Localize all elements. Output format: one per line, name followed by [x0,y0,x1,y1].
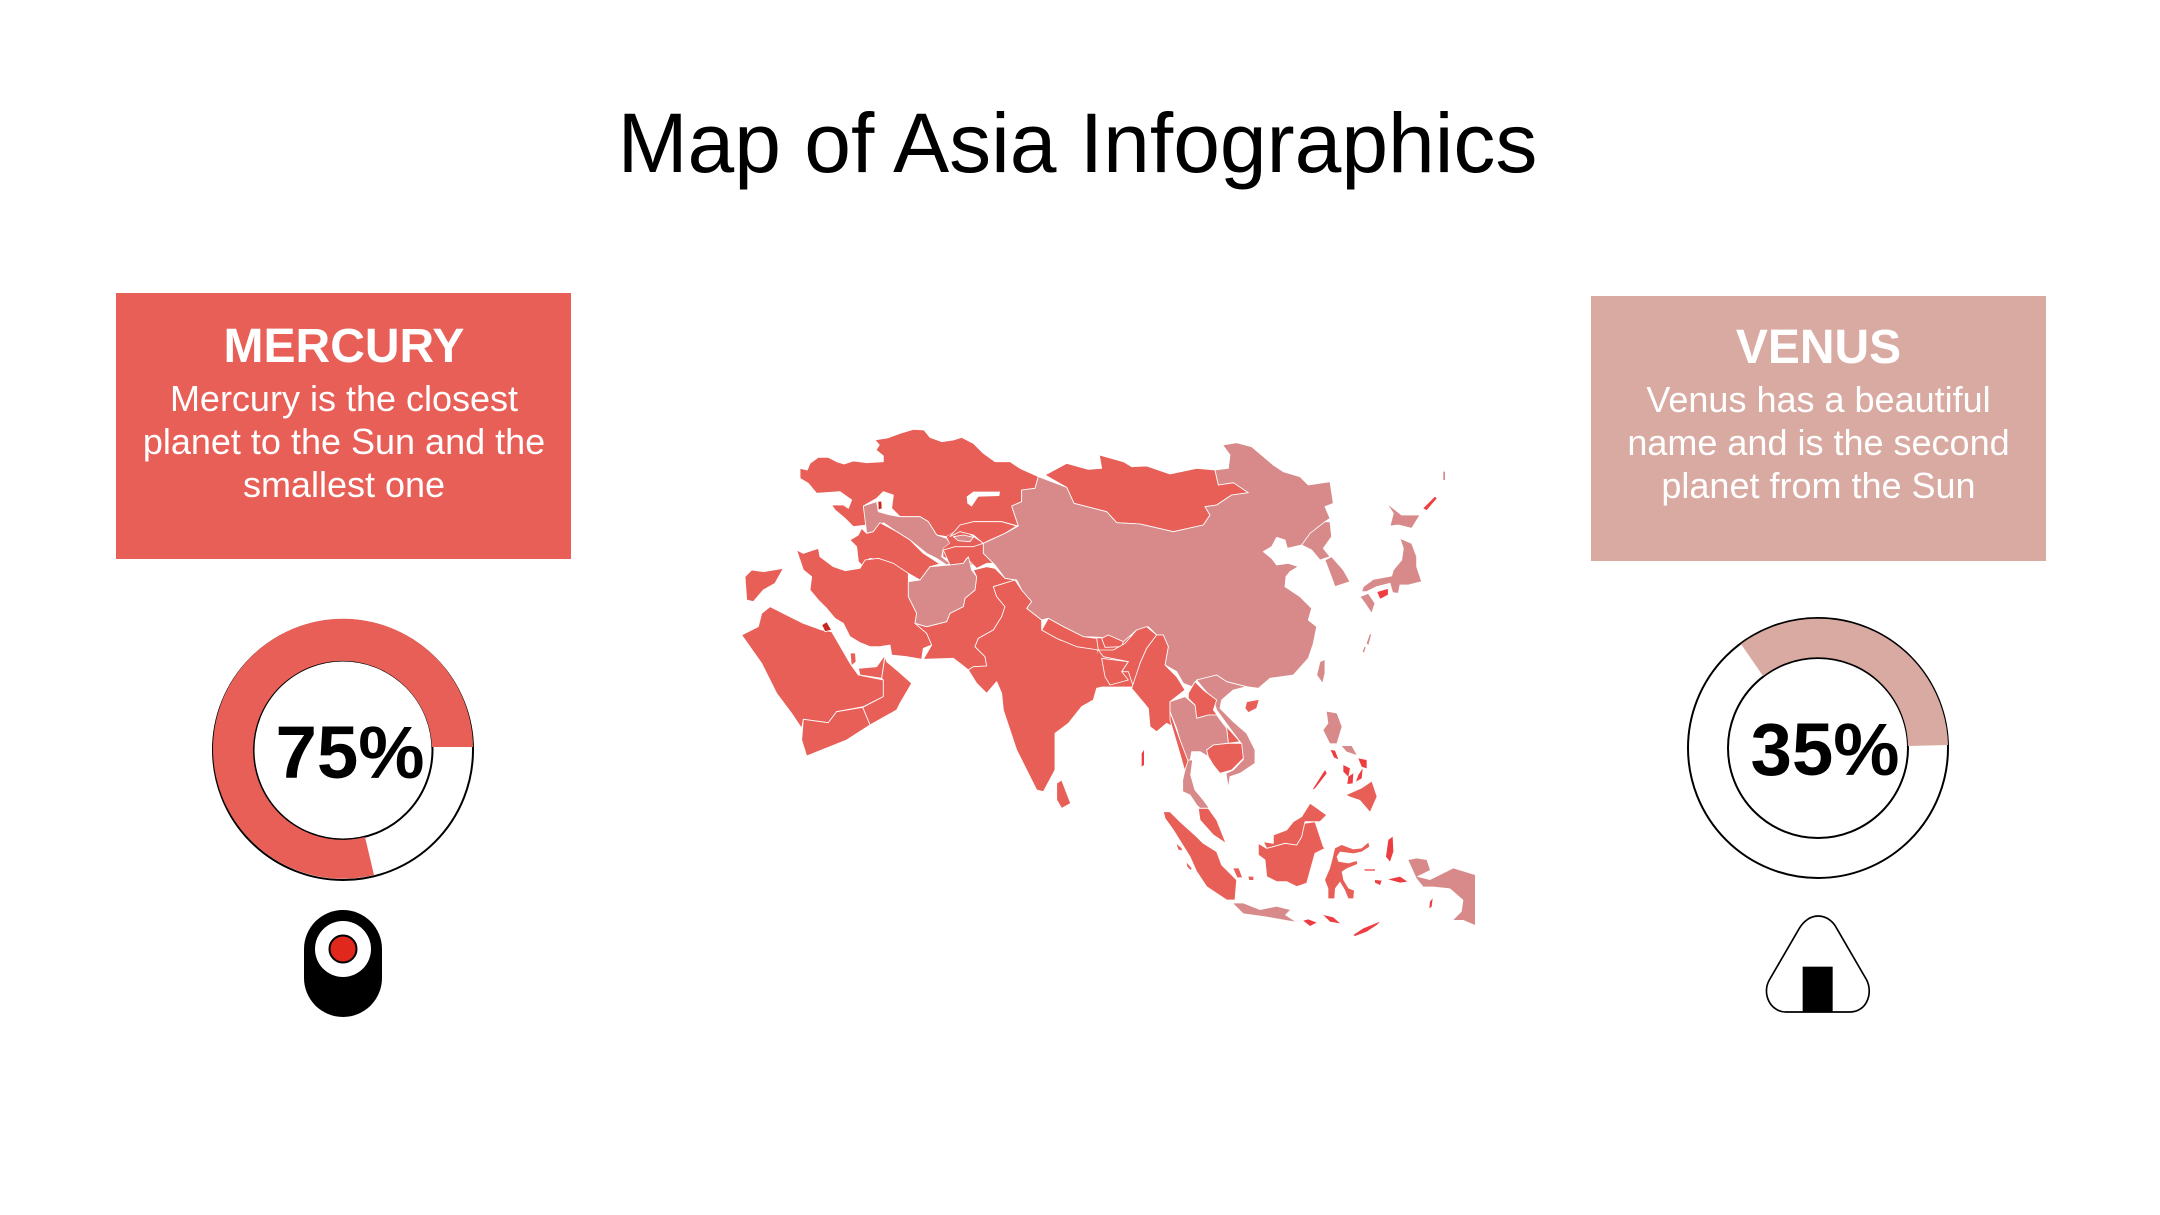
venus description: Venus has a beautiful [1646,379,1991,420]
title: Map of Asia Infographics [618,96,1537,190]
icon: onigiri [1766,916,1869,1012]
small island chains [1142,472,1445,767]
panel: mercury [116,293,571,559]
donut chart: 35% [1688,618,1948,878]
venus description: planet from the Sun [1661,465,1976,506]
donut chart: 75% [213,619,473,880]
value 35%: 35% [1750,708,1900,791]
venus heading: VENUS [1736,321,1901,374]
map of asia [742,429,1475,936]
venus description: name and is the second [1627,422,2010,463]
icon: sushi roll [304,910,382,1017]
mercury description: smallest one [243,464,445,505]
mercury description: Mercury is the closest [170,378,518,419]
mercury description: planet to the Sun and the [143,421,545,462]
west and south asia [742,429,1110,792]
east and southeast asia mainland [983,443,1422,788]
value 75%: 75% [275,711,425,794]
panel: venus [1591,296,2046,561]
maritime southeast asia [1057,712,1475,936]
mercury heading: MERCURY [224,320,464,373]
